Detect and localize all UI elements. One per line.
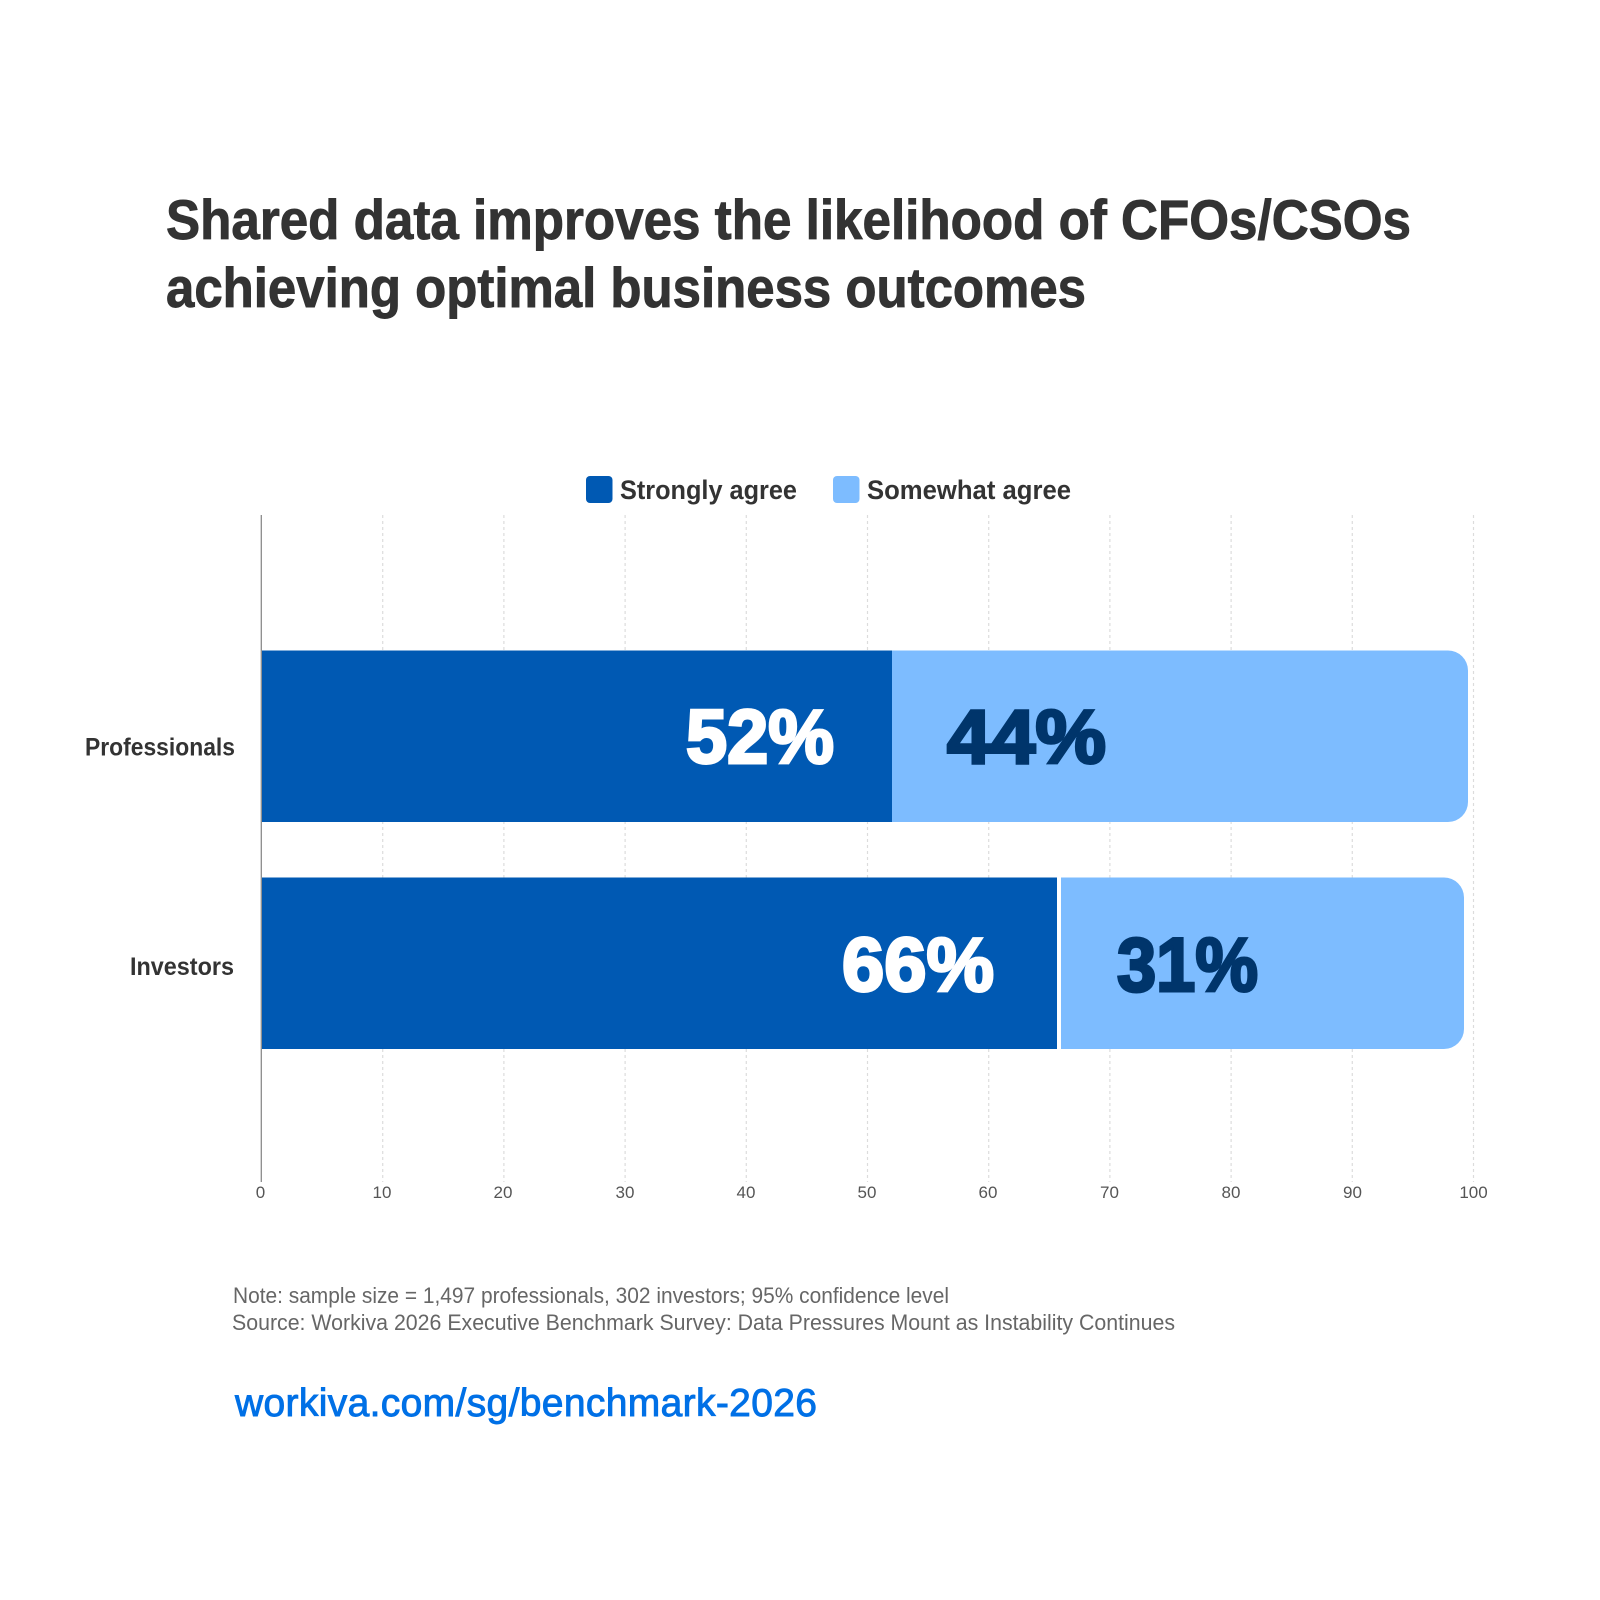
legend: [586, 475, 1071, 505]
bar: Investors: 66%: [842, 923, 994, 1008]
bar: Professionals: 52%: [686, 695, 834, 780]
x-axis tick labels: 20: [494, 1183, 512, 1202]
title: achieving optimal business outcomes: [166, 256, 1086, 319]
x-axis tick labels: 60: [979, 1183, 997, 1202]
bar: Investors: 31%: [1117, 923, 1258, 1008]
legend: Strongly agree: [620, 475, 797, 505]
x-axis tick labels: 10: [373, 1183, 391, 1202]
note and source: Source: Workiva 2026 Executive Benchmark Survey: Data Pressures Mount as Instability Continues: [232, 1310, 1175, 1335]
x-axis tick labels: 70: [1100, 1183, 1119, 1202]
x-axis tick labels: 30: [616, 1183, 634, 1202]
title: [166, 188, 1411, 319]
url link text: workiva.com/sg/benchmark-2026: [234, 1382, 817, 1425]
bar: Investors: [262, 878, 1464, 1049]
x-axis tick labels: 0: [256, 1183, 265, 1202]
x-axis tick labels: 90: [1343, 1183, 1362, 1202]
vertical axis line: [260, 515, 262, 1182]
bar: Professionals: [262, 650, 1468, 822]
x-axis tick labels: 100: [1459, 1183, 1488, 1202]
category labels: [85, 734, 235, 981]
bar: Professionals: 44%: [947, 695, 1106, 780]
note and source: [232, 1283, 1175, 1335]
x-axis tick labels: [256, 1183, 1488, 1202]
x-axis tick labels: 50: [858, 1183, 876, 1202]
x-axis tick labels: 40: [737, 1183, 755, 1202]
category labels: Professionals: [85, 734, 235, 762]
category labels: Investors: [130, 953, 234, 981]
x-axis tick labels: 80: [1222, 1183, 1240, 1202]
legend: Somewhat agree: [867, 475, 1071, 505]
note and source: Note: sample size = 1,497 professionals, 302 investors; 95% confidence level: [233, 1283, 949, 1308]
title: Shared data improves the likelihood of CFOs/CSOs: [166, 188, 1411, 251]
